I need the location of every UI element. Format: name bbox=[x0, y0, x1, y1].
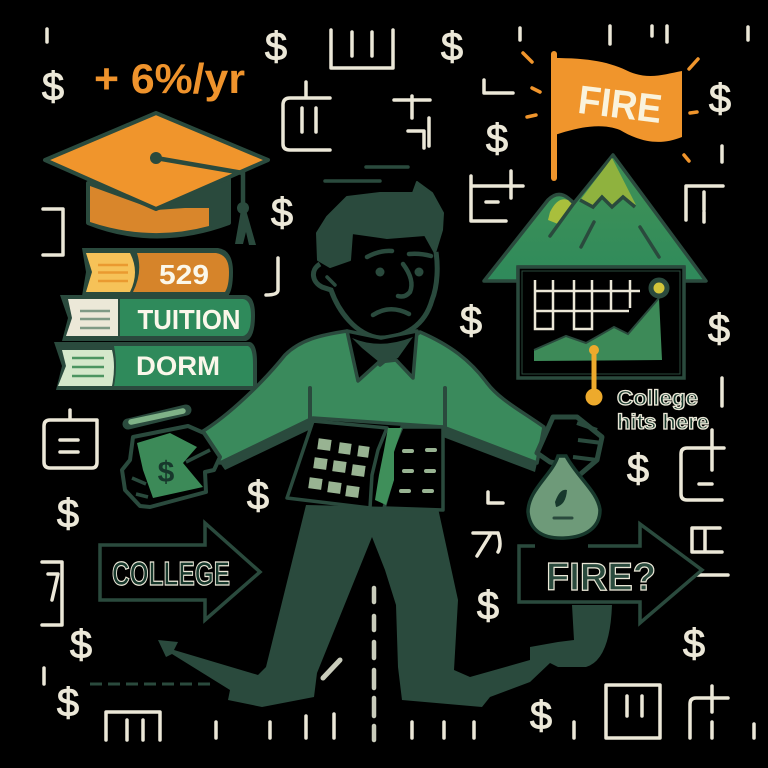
background doodles: dollar signs: $ bbox=[486, 117, 508, 161]
book: dorm bbox=[54, 342, 257, 390]
heading: +6%/yr: + 6%/yr bbox=[94, 55, 245, 102]
background doodles: dollar signs: $ bbox=[57, 492, 79, 536]
book: tuition: TUITION bbox=[138, 304, 240, 335]
icon: money bag in right hand bbox=[528, 417, 602, 538]
arrow: college bbox=[100, 523, 260, 620]
face outline bbox=[313, 252, 437, 338]
icon: FIRE flag: FIRE bbox=[576, 78, 664, 132]
book: dorm: DORM bbox=[136, 351, 220, 381]
face features bbox=[327, 251, 431, 315]
icon: mountain house bbox=[484, 155, 706, 406]
background doodles: dollar signs: $ bbox=[247, 474, 269, 518]
icon: jar of money in left hand: $ bbox=[158, 456, 175, 489]
figure: stressed man bbox=[122, 167, 612, 707]
legs bbox=[158, 505, 612, 707]
background doodles: dollar signs: $ bbox=[460, 299, 482, 343]
slash mark bbox=[323, 660, 340, 678]
torn budget bbox=[287, 421, 443, 510]
arrow: FIRE?: FIRE? bbox=[546, 556, 656, 599]
grid bbox=[535, 280, 640, 329]
sweater bbox=[200, 331, 544, 463]
background doodles: dollar signs: $ bbox=[683, 622, 705, 666]
dashed centre line bbox=[372, 588, 376, 740]
book: 529 bbox=[82, 248, 233, 296]
background doodles: dollar signs: $ bbox=[708, 307, 730, 351]
label: college hits here bbox=[617, 387, 709, 434]
icon: jar of money in left hand bbox=[122, 410, 220, 507]
dashed horizontal line bbox=[90, 682, 215, 686]
collar bbox=[347, 331, 417, 381]
sweater shadow bbox=[220, 418, 537, 472]
background doodles: dollar signs: $ bbox=[627, 447, 649, 491]
college marker bbox=[592, 350, 596, 396]
background doodles: dollar signs: $ bbox=[271, 191, 293, 235]
label: college hits here: College bbox=[617, 387, 698, 410]
arrow: college: COLLEGE bbox=[112, 555, 230, 592]
background doodles: dollar signs: $ bbox=[709, 77, 731, 121]
icon: graduation cap bbox=[45, 113, 268, 245]
books stack bbox=[54, 248, 257, 390]
area chart bbox=[534, 298, 662, 361]
background doodles: dollar signs: $ bbox=[477, 584, 499, 628]
arrow: FIRE? bbox=[519, 524, 702, 623]
icon: FIRE flag bbox=[523, 53, 698, 178]
book: tuition bbox=[60, 295, 255, 341]
chart panel bbox=[518, 267, 684, 378]
background doodles: dollar signs: $ bbox=[57, 681, 79, 725]
book: 529: 529 bbox=[159, 259, 209, 290]
background doodles: dollar signs: $ bbox=[70, 623, 92, 667]
background doodles: dollar signs: $ bbox=[265, 25, 287, 69]
background doodles: dollar signs: $ bbox=[441, 25, 463, 69]
worry marks bbox=[325, 167, 408, 181]
background doodles: dollar signs: $ bbox=[530, 694, 552, 738]
background doodles: dollar signs: $ bbox=[42, 65, 64, 109]
hair bbox=[317, 182, 443, 267]
label: college hits here: hits here bbox=[617, 411, 709, 434]
